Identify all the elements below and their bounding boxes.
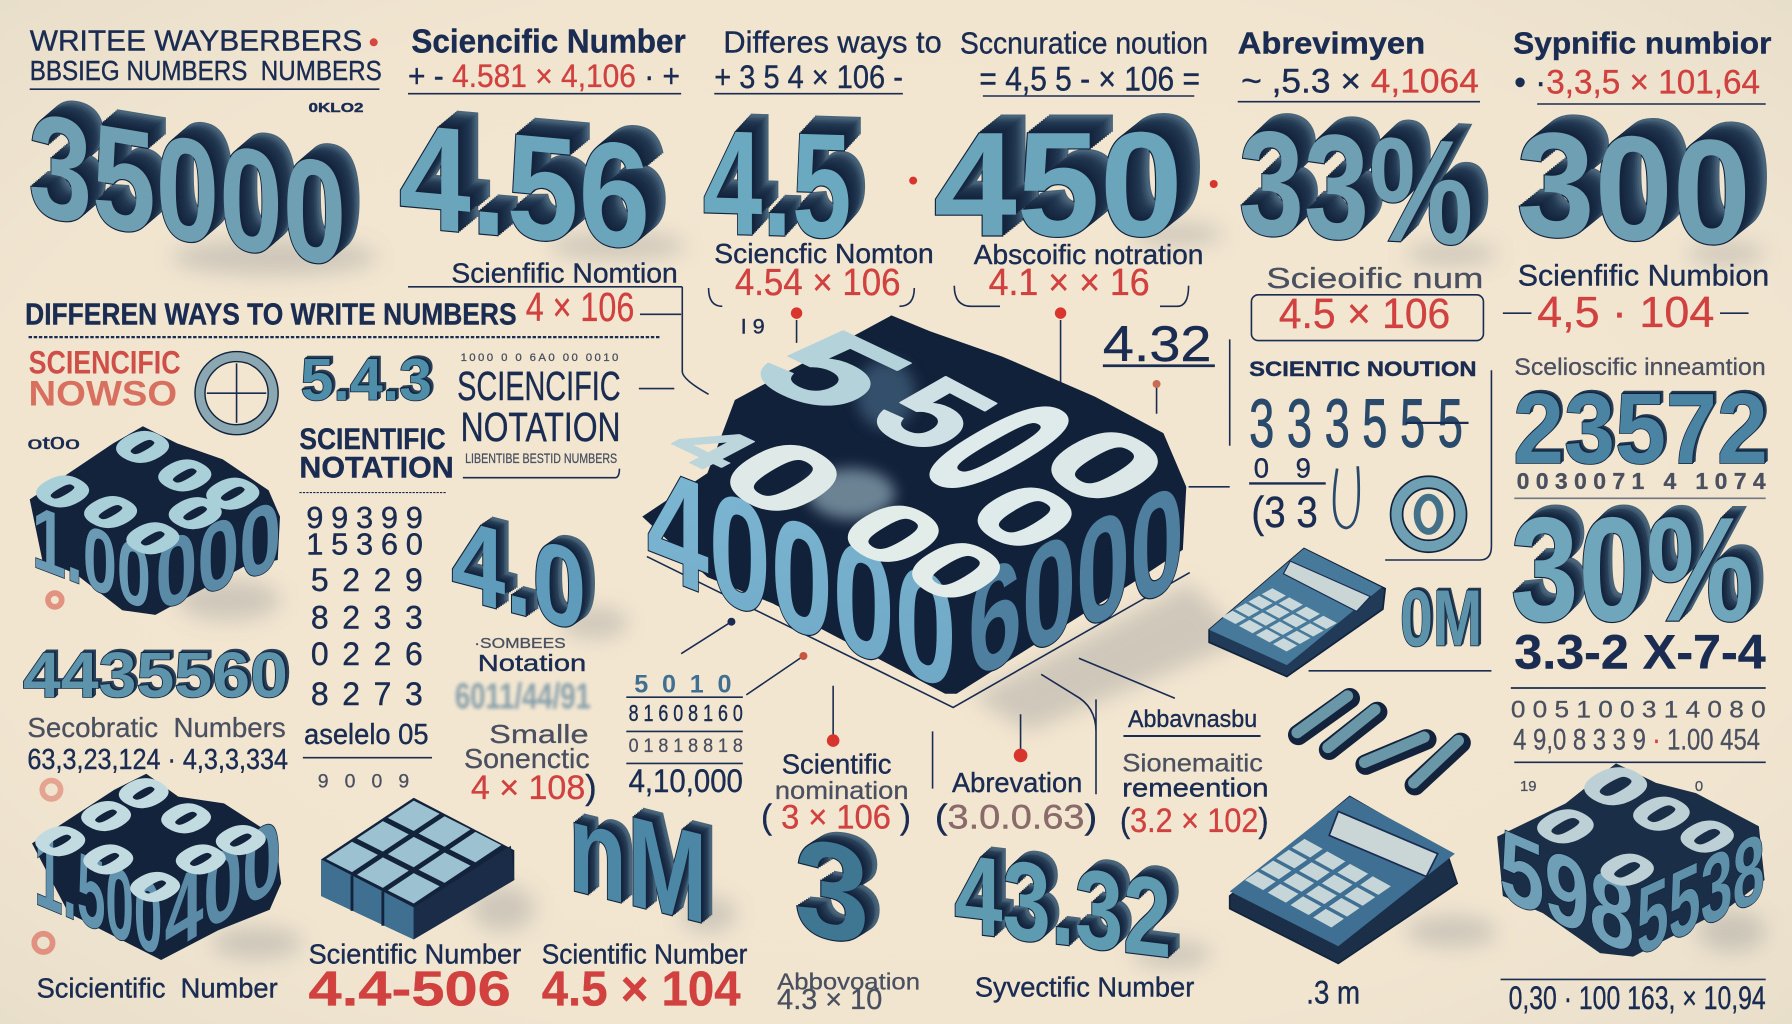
caption: ot0o xyxy=(27,433,80,453)
text block: smaller scientific: ·SOMBEES xyxy=(474,636,566,652)
heading: scientific notation large: SCIENCIFIC xyxy=(457,363,621,409)
label: abbreviation: Abrevation xyxy=(952,767,1082,798)
label: schematic representation: (3.2 × 102) xyxy=(1120,802,1269,840)
heading: write ways: WRITEE WAYBERBERS xyxy=(30,25,362,57)
value: formula 4,5: = 4,5 5 - × 106 = xyxy=(979,60,1200,98)
3D number cluster: bottom right: 0 xyxy=(1516,798,1613,856)
panel: right scientific notation xyxy=(1249,356,1477,546)
icon: crosshair ring xyxy=(200,357,273,430)
digit table column xyxy=(303,500,432,792)
3D number cluster: 1.5004000: 0 xyxy=(200,815,282,865)
3D number cluster: 1.000000: 0 xyxy=(151,486,240,540)
value: scientific number formula: + - 4.581 × 4,106 · + xyxy=(408,58,680,94)
3D number cluster: 1.5004000: 0 xyxy=(160,835,242,884)
3D number cluster: bottom right: 0 xyxy=(1581,843,1672,898)
label: schematic representation xyxy=(1120,706,1269,840)
3D number cluster: 1.000000: 1.00 xyxy=(32,485,151,630)
digit table column: 9 0 0 9 xyxy=(318,770,409,792)
icon: ring zero xyxy=(1397,482,1461,546)
text block: secondary numbers: 63,3,23,124 · 4,3,3,334 xyxy=(27,744,288,776)
text block: smaller scientific: 4 × 108) xyxy=(471,769,597,807)
heading: scientific notation large: 1000 0 0 6A0 00 0010 xyxy=(461,352,618,364)
callout: abbreviated notation: Abscoific notration xyxy=(974,239,1203,270)
3D number cluster: 1.5004000: 0 xyxy=(103,768,185,818)
text block: numbers with rules: 0 xyxy=(1695,779,1703,795)
text block: number list with rules: 5 0 1 0 xyxy=(634,671,731,699)
3D number cluster: 1.5004000: 0 xyxy=(145,793,227,843)
3D number cluster: bottom right xyxy=(1497,754,1765,977)
heading: scientific notation large: LIBENTIBE BESTID NUMBERS xyxy=(465,451,617,466)
3D number cluster: 1.000000 xyxy=(19,420,281,633)
label: synthetic number: Syvectific Number xyxy=(975,972,1194,1003)
label: 3 m: .3 m xyxy=(1306,974,1360,1010)
value: abbreviation formula: ~ ,5.3 × 4,1064 xyxy=(1241,63,1479,101)
heading: scientific notation small: NOTATION xyxy=(299,452,454,485)
3D number cluster: 1.000000: 000 xyxy=(155,479,281,633)
3D number cluster: bottom right: 0 xyxy=(1561,754,1670,819)
3D number: 4.56: 4.56 xyxy=(399,92,650,281)
label and value: 4.4-506: Scientific Number xyxy=(309,938,521,969)
label: schematic representation: remeention xyxy=(1122,773,1269,803)
digit table column: 0 2 2 6 xyxy=(311,636,423,672)
top face digits: 0 xyxy=(942,466,1108,568)
label: abbreviation 4.3 x 10: 4.3 × 10 xyxy=(777,984,882,1016)
soft shadows under 3D objects xyxy=(171,223,1766,968)
text block: secondary numbers xyxy=(27,712,288,776)
label and value: 4.5 x 104 xyxy=(542,938,747,1017)
3D number: 43.32: 43.32 xyxy=(954,830,1171,981)
text block: smaller scientific: 6011/44/91 xyxy=(455,676,591,717)
3D value: 5.4.3: 5.4.3 xyxy=(301,346,432,413)
3D keypad block xyxy=(321,798,514,939)
label: schematic representation: Sionemaitic xyxy=(1122,749,1263,777)
fraction sketch: 0 9 xyxy=(1254,453,1311,484)
callout: abbreviated notation xyxy=(954,239,1203,306)
caption: Scelioscific inneamtion xyxy=(1514,354,1766,381)
3D number: 450: 450 xyxy=(934,102,1183,267)
formula: 3.3-2 X-7-4 xyxy=(1514,627,1766,680)
panel: top row number headers xyxy=(30,24,1771,115)
text block: numbers with rules: 19 xyxy=(1520,779,1537,795)
panel: right column numbers xyxy=(1511,354,1768,795)
heading: scientific notation: SCIENTIC NOUTION xyxy=(1249,356,1477,381)
panel: bottom labels xyxy=(37,938,1766,1017)
heading: scientific notation large xyxy=(457,352,621,478)
text block: secondary numbers: Secobratic Numbers xyxy=(27,712,286,743)
panel: left scientific notation xyxy=(27,345,621,493)
caption digits: 0 0 3 0 0 7 1 4 1 0 7 4 xyxy=(1517,468,1766,494)
digit row: 3 3 3 5 5 5 xyxy=(1249,385,1463,462)
top face digits: 5 xyxy=(838,357,1027,471)
text block: numbers with rules: 4 9,0 8 3 3 9 · 1.00 454 xyxy=(1513,724,1760,757)
top face digits: 0 xyxy=(689,420,878,537)
3D number cluster: 1.000000: 0 xyxy=(109,512,197,565)
heading: scientific notation red xyxy=(29,345,181,414)
label: abbreviation 4.3 x 10 xyxy=(777,969,920,1016)
text block: number list with rules xyxy=(626,671,743,799)
fraction sketch: (3 3 xyxy=(1251,489,1318,537)
label: abbreviation: (3.0.0.63 ) xyxy=(935,799,1097,837)
label and value: 4.4-506 xyxy=(309,938,521,1017)
top face digits: 0 xyxy=(813,484,974,584)
label: abbreviation 4.3 x 10: Abbovoation xyxy=(777,969,920,995)
label: scientific nomination xyxy=(761,749,911,837)
heading: different ways to: Differes ways to xyxy=(723,25,942,60)
callout: scientific number right xyxy=(1503,260,1769,337)
icon: diagonal bars xyxy=(1297,696,1461,785)
callout: scientific number right: 4,5 · 104 xyxy=(1537,289,1714,337)
label: scientific nomination: nomination xyxy=(775,777,909,805)
3D shape: letter M: nM xyxy=(568,773,707,952)
text block: number list with rules: 4,10,000 xyxy=(629,763,743,799)
callout: scientific number box: Scieoific num xyxy=(1266,263,1483,295)
central 3D number block xyxy=(642,310,1199,726)
text block: number list with rules: 8 1 6 0 8 1 6 0 xyxy=(629,700,743,726)
top face digits xyxy=(645,310,1199,619)
3D shape: numeral 3: 3 xyxy=(794,808,870,975)
3D number cluster: 1.000000: 0 xyxy=(141,449,229,502)
digit table column: 9 9 3 9 9 xyxy=(306,500,423,535)
3D number cluster: 1.000000: 0 xyxy=(99,420,187,474)
heading: different ways to write numbers: 4 × 106 xyxy=(526,284,634,330)
red marker dots xyxy=(909,177,1218,188)
label: scientific nomination: Scientific xyxy=(782,749,891,780)
3D number: 300: 300 xyxy=(1517,100,1751,277)
3D number cluster: bottom right: 0 xyxy=(1612,785,1709,843)
heading: scientific notation large: NOTATION xyxy=(461,404,621,450)
callout: scientific notation left: Scienfific Nomtion xyxy=(451,257,678,288)
callout: abbreviated notation: 4.1 × × 16 xyxy=(989,261,1150,303)
3D number: 35000: 35000 xyxy=(29,83,346,299)
front right digits: 6000 xyxy=(968,450,1184,711)
label: abbreviation xyxy=(935,767,1097,837)
top face digits: 4 xyxy=(645,413,779,481)
3D number cluster: 1.5004000 xyxy=(19,768,282,979)
heading: scientific notation red: NOWSO xyxy=(29,374,177,414)
top face digits: 0 xyxy=(878,523,1033,619)
heading: different ways to write numbers xyxy=(25,284,681,337)
label: schematic representation: Abbavnasbu xyxy=(1128,706,1257,733)
3D number: 4.5: 4.5 xyxy=(703,99,851,270)
3D number cluster: 1.000000: 0 xyxy=(19,465,107,518)
heading: scientific number: Sciencific Number xyxy=(411,24,686,61)
panel: scientific notation callouts xyxy=(408,238,1769,394)
text block: numbers with rules: 0 0 5 1 0 0 3 1 4 0 8 0 xyxy=(1511,697,1766,724)
top face digits: 5 xyxy=(713,310,950,431)
callout: scientific notation left xyxy=(408,257,709,394)
digit table column: 5 2 2 9 xyxy=(311,562,423,598)
3D number: 33%: 33% xyxy=(1239,98,1473,277)
callout: scientific number box xyxy=(1251,263,1483,341)
icon: red stamp marks xyxy=(34,593,62,952)
value: 4.32: 4.32 xyxy=(1103,315,1211,372)
label and value: 4.4-506: 4.4-506 xyxy=(309,963,511,1017)
front left digits: 40000 xyxy=(647,431,957,726)
3D number cluster: 1.000000: 0 xyxy=(189,467,277,521)
callout: scientific notation 4.54 xyxy=(709,238,934,306)
red pins and connector lines xyxy=(639,307,1491,794)
label and value: 4.5 x 104: 4.5 × 104 xyxy=(542,963,741,1017)
small tag: 0KLO2 xyxy=(309,101,363,115)
3D number cluster: 1.5004000: 400 xyxy=(165,795,281,978)
block body xyxy=(642,315,1186,694)
label: scientific nomination: ( 3 × 106 ) xyxy=(761,799,911,837)
text block: smaller scientific: Notation xyxy=(478,650,586,676)
icon: large calculator xyxy=(1230,797,1457,963)
label and value: 4.5 x 104: Scientific Number xyxy=(542,938,747,969)
rule xyxy=(1309,670,1491,672)
3D number cluster: 1.5004000: 0 xyxy=(65,791,147,841)
value: significant formula: • ·3,3,5 × 101,64 xyxy=(1514,64,1760,102)
3D value: 4435560: 4435560 xyxy=(23,639,288,711)
3D number cluster: 1.5004000: 0 xyxy=(114,862,197,912)
heading: abbreviation: Abrevimyen xyxy=(1238,26,1425,61)
3D number cluster: bottom right: 0 xyxy=(1661,810,1752,865)
3D label: 0M: 0M xyxy=(1400,574,1482,663)
digit table column: 8 2 3 3 xyxy=(311,600,423,636)
value: formula 106: + 3 5 4 × 106 - xyxy=(714,59,903,95)
heading: significant number: Sypnific numbior xyxy=(1513,26,1771,61)
icon: calculator top xyxy=(1209,549,1385,677)
heading: different ways to write numbers: DIFFEREN WAYS TO WRITE NUMBERS xyxy=(25,297,517,332)
digit table column: 8 2 7 3 xyxy=(311,676,423,712)
top face digits: 0 xyxy=(1010,407,1199,524)
3D number cluster: 1.5004000: 0 xyxy=(19,816,102,866)
3D number cluster: bottom right: 598 xyxy=(1499,807,1634,977)
label: scientific number left: Scicientific Number xyxy=(37,973,278,1004)
callout: scientific notation 4.54: 4.54 × 106 xyxy=(735,261,901,303)
text block: numbers with rules xyxy=(1511,688,1766,795)
text block: smaller scientific xyxy=(455,636,597,807)
block center shading xyxy=(808,360,915,519)
digit table column: 1 5 3 6 0 xyxy=(306,526,423,561)
3D number: 4.0: 4.0 xyxy=(451,493,586,656)
heading: scientific notation small: SCIENTIFIC xyxy=(299,423,446,456)
red pins and connector lines: I 9 xyxy=(741,314,765,339)
3D value: 23572: 23572 xyxy=(1513,373,1768,485)
text block: number list with rules: 0 1 8 1 8 8 1 8 xyxy=(629,735,743,757)
heading: scientific notation: Sccnuratice noution xyxy=(960,26,1208,61)
fraction sketch xyxy=(1249,453,1359,537)
text block: smaller scientific: Sonenctic xyxy=(464,743,590,774)
text block: smaller scientific: Smalle xyxy=(489,719,589,749)
3D number cluster: 1.5004000: 0 xyxy=(67,835,150,884)
heading: scientific notation small xyxy=(299,423,454,493)
top face digits: 0 xyxy=(878,376,1120,519)
callout: scientific number box: 4.5 × 106 xyxy=(1279,290,1450,337)
heading: scientific notation red: SCIENCIFIC xyxy=(29,345,181,381)
callout: scientific number right: Scienfific Numbion xyxy=(1518,260,1769,293)
subheading: numbers numbers: BBSIEG NUMBERS NUMBERS xyxy=(30,55,382,86)
digit table column: aselelo 05 xyxy=(304,719,429,751)
callout: scientific notation 4.54: Sciencfic Nomton xyxy=(714,238,934,269)
3D number cluster: 1.000000: 0 xyxy=(67,485,155,539)
